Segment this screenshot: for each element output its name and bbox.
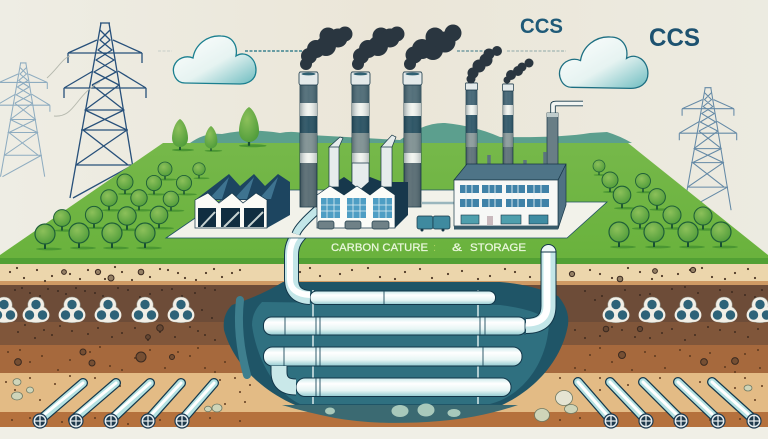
trucks (417, 216, 450, 230)
factory vent left (329, 137, 343, 187)
smoke plume 4 (466, 46, 502, 84)
tall chimney 2 (351, 72, 370, 187)
trees: right orchard (593, 160, 738, 248)
power tower: front left (64, 23, 146, 198)
reservoir wall highlight (239, 300, 247, 375)
tri-pipe bundles: right (603, 297, 768, 323)
building upper windows (460, 185, 549, 207)
field front edge (0, 258, 768, 264)
dashed line (158, 50, 566, 52)
reservoir inner chamber (252, 302, 549, 404)
soil layers (0, 264, 768, 439)
label: carbon capture and storage: : (433, 242, 436, 254)
window dividers (466, 185, 541, 207)
smoke plume 5 (504, 58, 534, 84)
sediment rocks (325, 404, 460, 417)
heading: CCS centre: CCS (520, 15, 563, 38)
factory centre tube (352, 163, 369, 190)
pipe joints (284, 291, 525, 396)
inlet pipe from the plant (290, 232, 310, 298)
elbow between third and fourth pipes (279, 366, 296, 387)
storage pipe: top (310, 291, 496, 304)
warehouse roofs (195, 174, 290, 228)
trees: left orchard (35, 162, 210, 250)
warehouse (195, 174, 290, 228)
short chimney 5 (502, 84, 514, 170)
label: carbon capture and storage: CARBON CATURE (331, 242, 428, 254)
storage reservoir (224, 282, 568, 422)
tall chimney 3 (403, 72, 422, 207)
tri-pipe bundles: left (0, 297, 194, 323)
heading: CCS right: CCS (649, 24, 700, 52)
cloud: right (560, 37, 648, 88)
reservoir sediment (282, 405, 518, 423)
soil pebbles (15, 267, 738, 366)
diagonal pipes: right (578, 382, 754, 420)
window mullions (321, 198, 392, 218)
diagonal pipes: left (40, 383, 214, 420)
smoke plume 1 (300, 26, 352, 70)
bay highlights (201, 212, 263, 227)
tall chimney 1 (299, 72, 318, 207)
outlet pipe on the right (526, 245, 556, 326)
bent exhaust stack (547, 104, 583, 165)
reservoir shell (224, 282, 568, 422)
warehouse front (195, 193, 267, 228)
ground floor doors (461, 215, 548, 225)
factory roofs (317, 177, 408, 228)
access road (422, 202, 458, 204)
factory vent right (381, 135, 396, 187)
distant hills (190, 123, 632, 143)
roof pipes (489, 152, 545, 170)
central factory (317, 135, 408, 229)
power tower: right (679, 88, 737, 210)
power cables (47, 56, 100, 116)
smoke plume 3 (404, 24, 462, 70)
cloud: left (173, 36, 256, 84)
diagonal pipe ends: right (604, 414, 761, 428)
building front (454, 180, 558, 226)
factory windows (321, 198, 392, 218)
storage pipe: third (264, 347, 522, 366)
soil rocks (12, 379, 752, 422)
storage pipe: fourth (296, 378, 511, 396)
short chimney 4 (466, 83, 478, 167)
label: carbon capture and storage: STORAGE (470, 242, 526, 254)
concrete plant pad (166, 190, 607, 238)
smoke plume 2 (352, 26, 404, 70)
main building (454, 152, 566, 230)
pipe road highlight (296, 210, 317, 234)
green field (0, 143, 768, 264)
building roof (454, 164, 566, 180)
label: carbon capture and storage: & (452, 242, 463, 254)
storage pipe: second (264, 317, 526, 335)
warehouse bays (198, 208, 264, 227)
soil speckles (6, 267, 762, 424)
pipe road to reservoir (296, 210, 317, 234)
diagonal pipe ends: left (33, 414, 189, 428)
forklifts (318, 221, 389, 229)
vertical pipe supports (313, 290, 478, 404)
factory front gables (317, 186, 395, 228)
building base (454, 226, 558, 230)
trees: tall row (172, 107, 266, 152)
building side (558, 164, 566, 229)
power tower: back left (0, 63, 50, 177)
label: carbon capture and storage (331, 242, 526, 254)
